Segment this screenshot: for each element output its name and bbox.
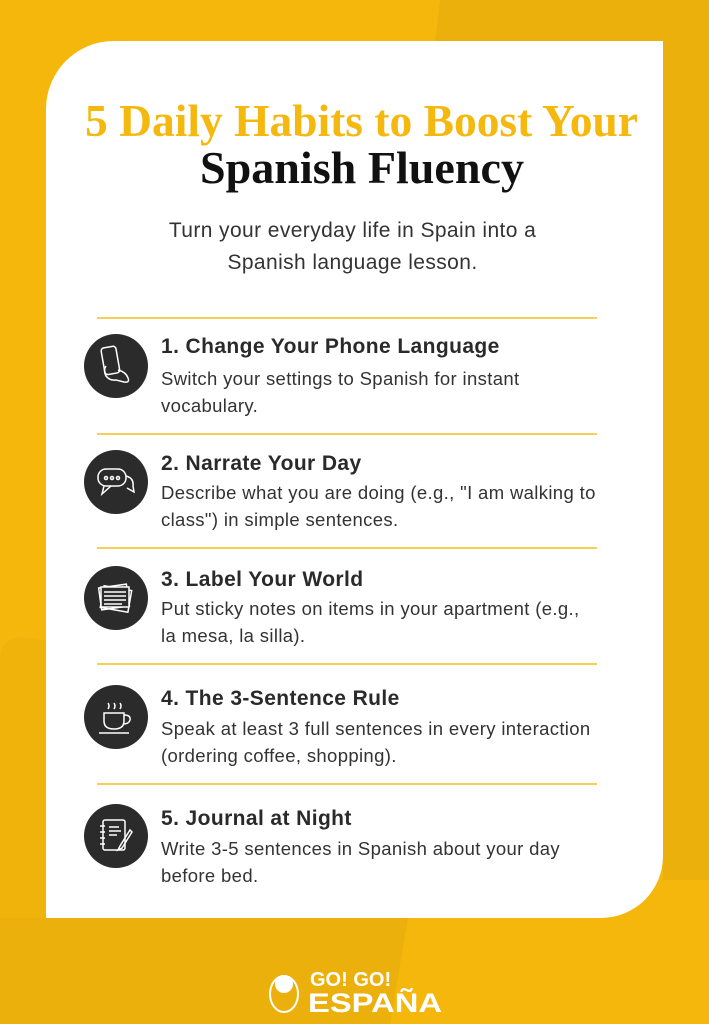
item 4: 4. The 3-Sentence Rule: [161, 687, 400, 710]
text: Put sticky notes on items in your apartment (e.g.,: [161, 598, 580, 619]
logo: [269, 969, 442, 1016]
text: vocabulary.: [161, 395, 258, 416]
text: Switch your settings to Spanish for instant: [161, 368, 520, 389]
subtitle: [169, 219, 536, 274]
subtitle: Turn your everyday life in Spain into a: [169, 219, 536, 242]
icon: coffee: [84, 685, 148, 749]
text: Write 3-5 sentences in Spanish about your day: [161, 838, 560, 859]
item 1: 1. Change Your Phone Language: [161, 335, 500, 358]
title: [85, 95, 638, 193]
text: Speak at least 3 full sentences in every interaction: [161, 718, 591, 739]
text: la mesa, la silla).: [161, 625, 305, 646]
item 2: 2. Narrate Your Day: [161, 452, 362, 475]
item 5: 5. Journal at Night: [161, 807, 352, 830]
item 3: 3. Label Your World: [161, 568, 363, 591]
title: Spanish Fluency: [200, 142, 524, 193]
card: [46, 41, 663, 918]
text: (ordering coffee, shopping).: [161, 745, 397, 766]
icon: phone: [84, 334, 148, 398]
icon: journal: [84, 804, 148, 868]
text: class") in simple sentences.: [161, 509, 398, 530]
text: before bed.: [161, 865, 258, 886]
logo: GO! GO!: [310, 969, 391, 991]
subtitle: Spanish language lesson.: [227, 251, 478, 274]
text: Describe what you are doing (e.g., "I am walking to: [161, 482, 596, 503]
icon: chat: [84, 450, 148, 514]
title: 5 Daily Habits to Boost Your: [85, 95, 638, 146]
icon: notes: [84, 566, 148, 630]
